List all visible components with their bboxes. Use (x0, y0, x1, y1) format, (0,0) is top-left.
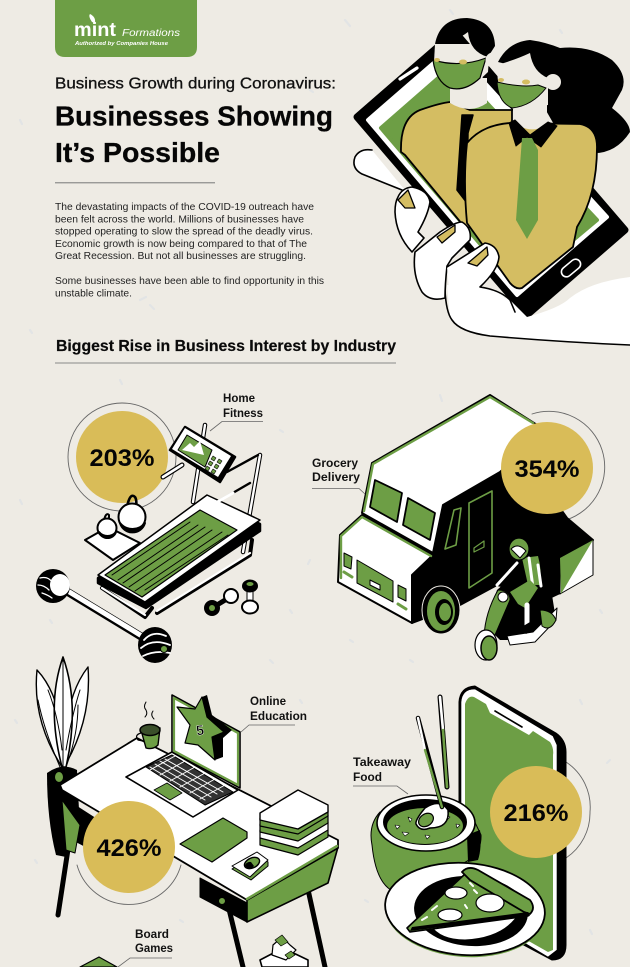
intro text: The devastating impacts of the COVID-19 outreach have (55, 202, 314, 213)
phone body (357, 32, 625, 315)
intro text: Great Recession. But not all businesses are struggling. (55, 251, 306, 262)
van (338, 395, 593, 623)
online education desk illustration (36, 657, 338, 967)
label: takeaway food: Takeaway (353, 757, 412, 769)
dumbbells (204, 580, 258, 616)
label: online education: Online (250, 696, 286, 708)
intro text: Some businesses have been able to find opportunity in this (55, 276, 324, 287)
mouse and pad (232, 852, 268, 880)
main title: Businesses Showing (55, 100, 333, 132)
intro text (55, 202, 324, 299)
intro text: Economic growth is now being compared to that of The (55, 239, 307, 250)
gold stat circle (501, 422, 593, 514)
treadmill console (170, 427, 235, 482)
gold stat circle (83, 801, 175, 893)
phone home button (559, 257, 583, 279)
star rating (177, 695, 232, 760)
chopsticks (440, 697, 447, 787)
label: grocery delivery: Delivery (312, 472, 361, 484)
gold stat circle (490, 766, 582, 858)
grocery delivery illustration (338, 395, 605, 660)
label: home fitness (210, 393, 263, 431)
soup bowl (371, 795, 481, 892)
label: online education: Education (250, 711, 307, 723)
takeaway food illustration (371, 686, 590, 962)
plant (36, 657, 88, 857)
smartphone (459, 686, 566, 960)
gold stat circle: 216% (504, 800, 568, 827)
label: board games (118, 929, 173, 967)
label: takeaway food: Food (353, 772, 382, 784)
logo: Mint Formations: Authorized by Companies House (74, 41, 168, 47)
desk underside and drawers (60, 795, 130, 860)
intro text: stopped operating to slow the spread of the deadly virus. (55, 227, 313, 238)
gold stat circle: 354% (514, 456, 580, 483)
desk legs (58, 823, 325, 967)
gold stat circle: 426% (96, 835, 162, 862)
ring (566, 762, 590, 858)
ring (68, 403, 176, 511)
label: board games: Board (135, 929, 169, 941)
front figure (465, 123, 597, 288)
treadmill uprights (193, 425, 260, 552)
green tie (516, 138, 538, 239)
desk top (60, 738, 338, 900)
waste bin (260, 935, 308, 967)
gold stat circle: 203% (90, 445, 154, 472)
pizza slice (407, 868, 533, 932)
intro text: been felt across the world. Millions of businesses have (55, 214, 304, 225)
kettlebells (98, 496, 146, 538)
finger two (414, 222, 470, 299)
label: board games: Games (135, 943, 173, 955)
home fitness illustration (36, 403, 260, 663)
long hair of front figure (498, 40, 630, 153)
board game (80, 957, 117, 967)
logo: Mint Formations: Formations (122, 28, 180, 39)
scooter rider (475, 538, 557, 660)
logo: Mint Formations: mint (74, 20, 117, 41)
main title (55, 100, 333, 168)
section heading: Biggest Rise in Business Interest by Industry (56, 338, 396, 355)
ring (77, 865, 181, 904)
plate (382, 858, 548, 962)
pointing finger (354, 150, 404, 190)
finger one (395, 187, 430, 252)
intro text: unstable climate. (55, 288, 132, 299)
books (260, 790, 328, 855)
subtitle: Business Growth during Coronavirus: (55, 76, 336, 92)
label: home fitness: Home (223, 393, 255, 405)
label: home fitness: Fitness (223, 408, 263, 420)
back figure (401, 102, 512, 230)
label: grocery delivery: Grocery (312, 458, 359, 470)
arm and palm (447, 277, 630, 345)
gold stat circle (76, 411, 168, 503)
desk mat (180, 818, 247, 862)
hero illustration: masked workers in a phone (354, 18, 630, 345)
label: online education (241, 696, 307, 732)
finger three (447, 243, 515, 312)
laptop (126, 695, 240, 817)
barbell (36, 569, 172, 663)
ring (532, 411, 605, 520)
delivery box (560, 540, 593, 594)
main title: It’s Possible (55, 137, 220, 168)
weight board (85, 527, 140, 560)
treadmill deck (98, 493, 260, 617)
label: grocery delivery (312, 458, 365, 494)
van wheel (422, 586, 460, 634)
mug (137, 702, 160, 749)
spoon handle (418, 718, 442, 807)
logo: Mint Formations (55, 0, 197, 57)
star rating: 5 (195, 722, 205, 738)
label: takeaway food (353, 757, 412, 794)
